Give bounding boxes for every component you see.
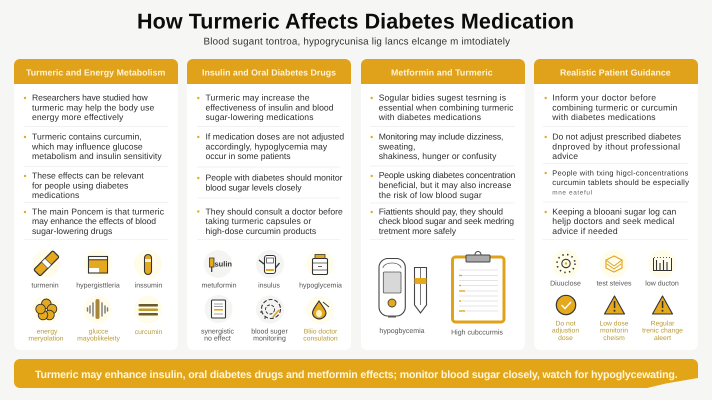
icon: stacked lines (134, 296, 162, 324)
label: metuformin: metuformin (201, 282, 237, 290)
bullet list: Fiattients should pay, they should (379, 206, 503, 216)
icon: bottle (306, 250, 334, 278)
label: test steives: test steives (596, 280, 632, 288)
label: regular trend change alert: trenic change (642, 328, 683, 334)
bullet list: metabolism and insulin sensitivity (32, 151, 162, 161)
bullet list: energy more effectively (32, 112, 124, 122)
bullet list: tretment more safely (379, 226, 457, 236)
label: turmenin: turmenin (31, 282, 59, 290)
bullet list: Inform your doctor before (552, 93, 656, 103)
bullet list: taking turmeric capsules or (206, 216, 311, 226)
label: low dose monitorin cheism: cheism (603, 335, 625, 342)
icon: document (204, 295, 232, 323)
label: energy meryolation: energy (37, 328, 58, 336)
icon: molecule burst (552, 250, 580, 278)
label: regular trend change alert: Regular (651, 320, 675, 328)
bullet list: occur in some patients (206, 151, 290, 161)
title: How Turmeric Affects Diabetes Medication (137, 10, 574, 34)
icon: supplement box (84, 250, 112, 278)
bullet list: People with diabetes should monitor (206, 173, 343, 183)
bullet list: medications (32, 190, 79, 200)
label: inssumin: inssumin (135, 282, 162, 290)
panel heading: Realistic Patient Guidance (560, 68, 671, 78)
bullet list: Monitoring may include dizziness, (379, 132, 503, 142)
bullet list: check blood sugar and seek medring (379, 216, 514, 226)
bullet list: accordingly, hypoglycemia may (206, 141, 328, 151)
bullet list: Researchers have studied how (32, 93, 148, 103)
icon: glucose device (256, 250, 284, 278)
icon: envelope shield (600, 250, 628, 278)
label: doctor consultation: consulation (303, 336, 338, 342)
bullet list: turmeric may help the body use (32, 102, 155, 112)
label: do not adjustion dose: Do not (555, 320, 576, 328)
icon: capsule (134, 250, 162, 278)
banner text: Turmeric may enhance insulin, oral diabetes drugs and metformin effects; monitor blood sugar closely, watch for hypoglycewating. (35, 369, 678, 381)
icon: insulin pen (204, 250, 232, 278)
label: low ducton: low ducton (645, 280, 679, 288)
panel: turmeric and energy metabolism (14, 59, 178, 350)
bullet list: may enhance the effects of blood (32, 216, 156, 226)
label: do not adjustion dose: adjustion (552, 328, 579, 334)
bullet list: People usking diabetes concentration (379, 170, 516, 180)
bullet list: beneficial, but it may also increase (379, 180, 512, 190)
label: energy meryolation: meryolation (28, 336, 64, 342)
bullet list: Do not adjust prescribed diabetes (552, 132, 681, 142)
bullet list (24, 93, 168, 240)
icon: warning triangle (604, 296, 624, 314)
panel: metformin and turmeric (361, 59, 525, 350)
bullet list: People with txing higcl-concentrations (552, 168, 689, 178)
label: hypergisttleria: hypergisttleria (76, 282, 120, 290)
icon: warning triangle (652, 296, 672, 314)
label: diuuclose: Diuuclose (550, 280, 581, 288)
icon: flower (32, 296, 60, 324)
bullet list: If medication doses are not adjusted (206, 132, 344, 142)
bullet list: shakiness, hunger or confusity (379, 151, 497, 161)
bullet list: advice (552, 151, 578, 161)
label: hypoglycemia: hypoglycemia (299, 282, 342, 290)
panel heading: Insulin and Oral Diabetes Drugs (202, 68, 336, 78)
bullet list: blood sugar levels closely (206, 182, 302, 192)
panel heading: Metformin and Turmeric (391, 68, 493, 78)
panel heading: Turmeric and Energy Metabolism (26, 68, 165, 78)
icon: bandage (32, 250, 60, 278)
icon: drop (306, 296, 334, 324)
bullet list: combining turmeric or curcumin (552, 102, 678, 112)
bullet list: dnproved by ithout professional (552, 141, 680, 151)
bullet list: mne eateful (552, 190, 592, 196)
bullet list: for people using diabetes (32, 180, 128, 190)
bullet list: The main Poncem is that turmeric (32, 206, 165, 216)
icon: bars (648, 250, 676, 278)
bullet list: effectiveness of insulin and blood (206, 102, 334, 112)
bullet list: Turmeric contains curcumin, (32, 132, 142, 142)
subtitle: Blood sugant tontroa, hypogrycunisa lig lancs elcange m imtodiately (204, 36, 510, 48)
bullet list: essential when combining turmeric (379, 102, 514, 112)
bullet list: curcumin tablets should be especially (552, 178, 689, 187)
bullet list: Keeping a blooani sugar log can (552, 206, 677, 216)
bullet list: the risk of low blood sugar (379, 190, 482, 200)
label: insulus: insulus (258, 282, 280, 290)
icon: dotted gauge (256, 296, 284, 324)
label: doctor consultation: Bliio doctor (304, 328, 338, 336)
bullet list: advice if needed (552, 226, 618, 236)
icon: glucose meter (379, 258, 405, 318)
panel heading (14, 59, 178, 84)
label: glucce mayoblikeleity: mayoblikeleity (77, 336, 120, 342)
panel heading (187, 59, 351, 84)
bullet list: which may influence glucose (31, 141, 143, 151)
icon: test strip (414, 268, 426, 313)
icon: check circle (556, 295, 576, 315)
panel: insulin and oral diabetes drugs (187, 59, 351, 350)
label: do not adjustion dose: dose (558, 335, 573, 342)
icon: clipboard (452, 252, 504, 322)
label: regular trend change alert: aleert (654, 335, 671, 342)
bullet list: sweating, (379, 141, 415, 151)
bullet list (370, 93, 516, 240)
label: glucce mayoblikeleity: glucce (89, 328, 109, 336)
icon: waveform (84, 296, 112, 324)
bullet list: Turmeric may increase the (206, 93, 310, 103)
label: curcumin: curcumin (135, 329, 163, 336)
bullet list: Sogular bidies sugest tesrning is (379, 93, 506, 103)
bullet list: sugar-lowering drugs (32, 226, 112, 236)
panel heading (361, 59, 525, 84)
label: synergistic no effect: no effect (204, 334, 231, 342)
bottom banner (14, 359, 698, 388)
label: low dose monitorin cheism: monitorin (600, 328, 628, 334)
bullet list: These effects can be relevant (32, 170, 144, 180)
panel heading (534, 59, 698, 84)
bullet list: with diabetes medications (551, 112, 656, 122)
label: hypogbycemia: hypogbycemia (379, 327, 425, 335)
icon: insulin pen: sulin (214, 260, 232, 268)
bullet list (197, 93, 344, 240)
label: blood suger monitoring: monitoring (253, 334, 286, 342)
bullet list: They should consult a doctor before (206, 206, 343, 216)
bullet list: with diabetes medications (378, 112, 481, 122)
label: blood suger monitoring: blood suger (251, 328, 288, 336)
panel: realistic patient guidance (534, 59, 698, 350)
bullet list: sugar-lowering medications (206, 112, 314, 122)
label: high cubccurmis: High cubccurmis (451, 328, 503, 336)
bullet list: heljp doctors and seek medical (552, 216, 674, 226)
bullet list (543, 93, 689, 240)
label: low dose monitorin cheism: Low dose (599, 320, 629, 328)
label: synergistic no effect: synergistic (201, 328, 235, 336)
bullet list: high-dose curcumin products (206, 226, 316, 236)
